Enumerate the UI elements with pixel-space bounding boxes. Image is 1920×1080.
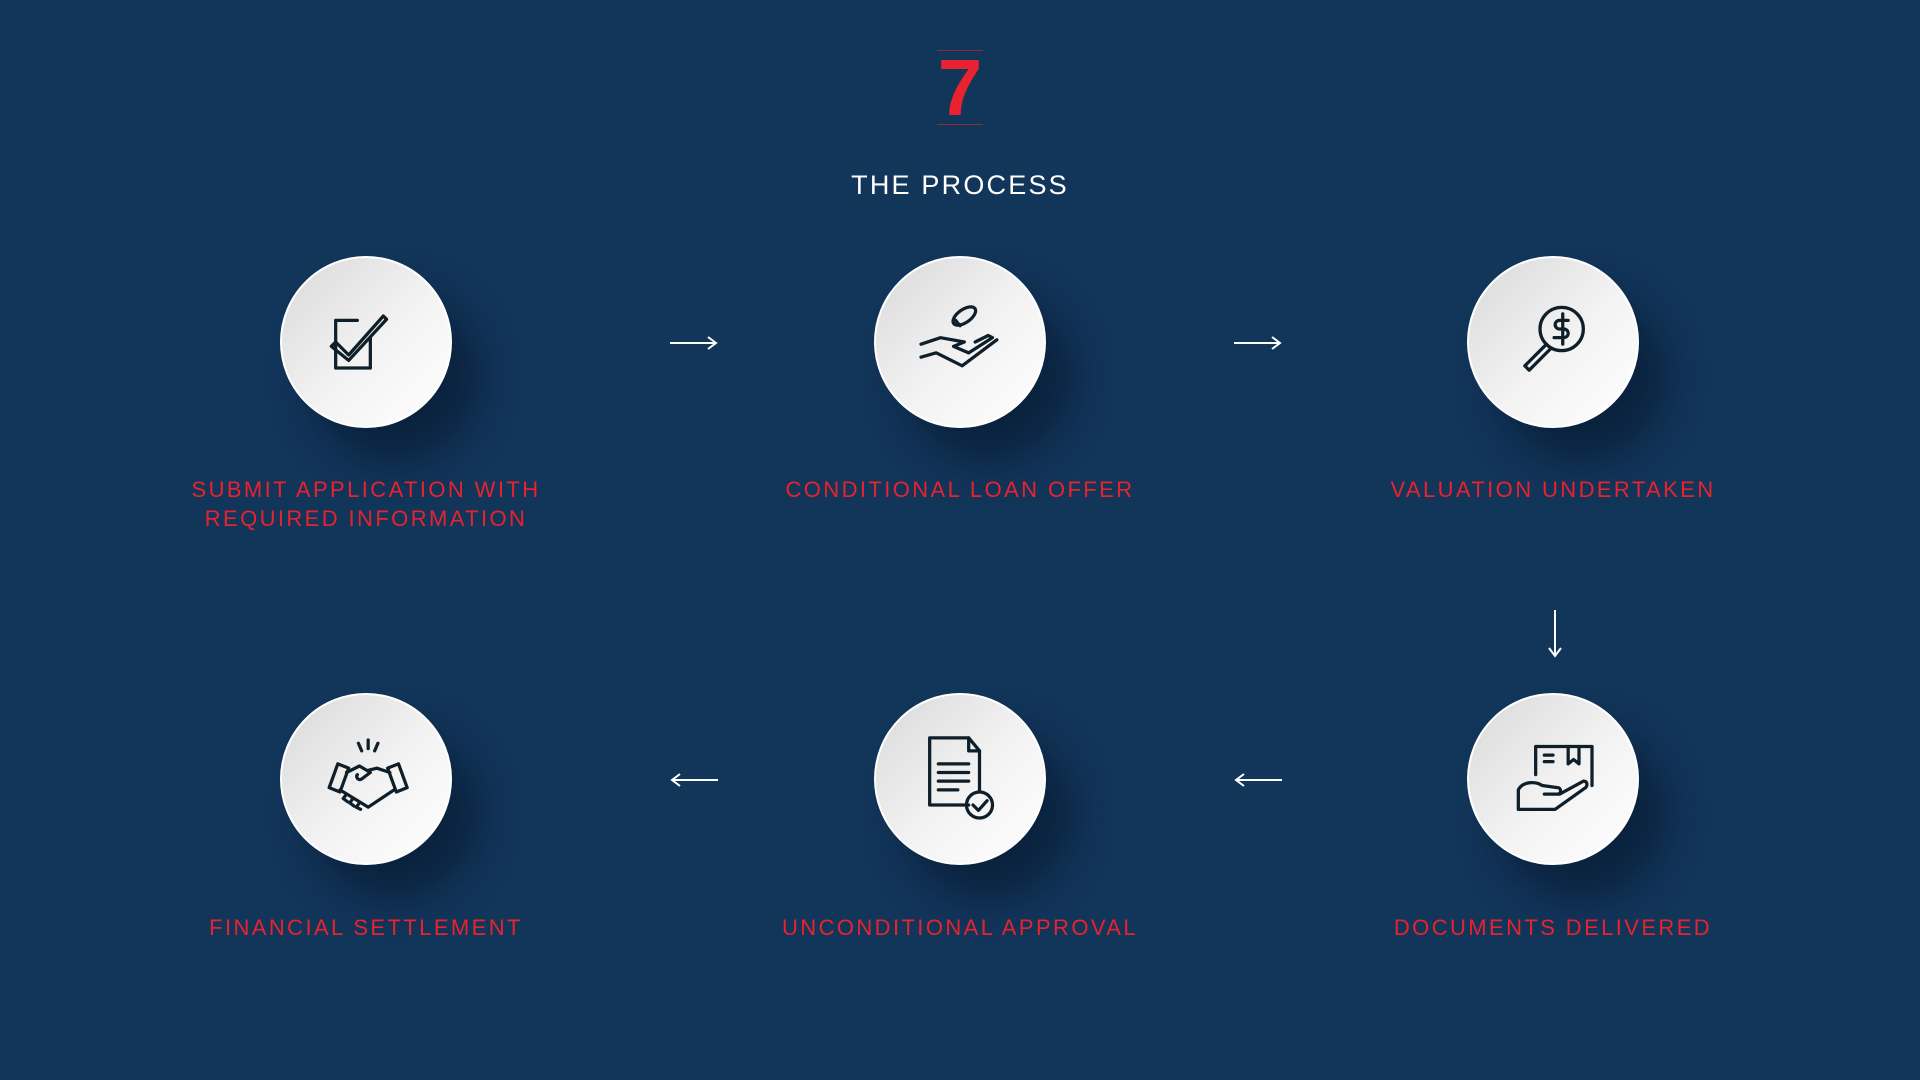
- step 4 circle: documents hand icon: [1467, 693, 1639, 865]
- step 2 circle: hand coin icon: [874, 256, 1046, 428]
- step 4 label: DOCUMENTS DELIVERED: [1394, 915, 1712, 940]
- step 3 circle: magnifier dollar icon: [1467, 256, 1639, 428]
- header: number 7: 7: [938, 43, 982, 132]
- step 5 circle: document check icon: [874, 693, 1046, 865]
- step 1 label: REQUIRED INFORMATION: [205, 506, 527, 531]
- step 1 label: [192, 477, 540, 531]
- step 5 label: UNCONDITIONAL APPROVAL: [782, 915, 1138, 940]
- arrow 5: [670, 773, 718, 787]
- arrow 4: [1234, 773, 1282, 787]
- step 1 label: SUBMIT APPLICATION WITH: [192, 477, 540, 502]
- arrow down: [1548, 610, 1562, 658]
- arrow 2: [1234, 336, 1282, 350]
- step 6 circle: handshake icon: [280, 693, 452, 865]
- step 6 label: FINANCIAL SETTLEMENT: [209, 915, 523, 940]
- step 2 label: CONDITIONAL LOAN OFFER: [785, 477, 1135, 502]
- step 1 circle: checkbox icon: [280, 256, 452, 428]
- title: THE PROCESS: [851, 170, 1069, 200]
- arrow 1: [670, 336, 718, 350]
- step 3 label: VALUATION UNDERTAKEN: [1390, 477, 1716, 502]
